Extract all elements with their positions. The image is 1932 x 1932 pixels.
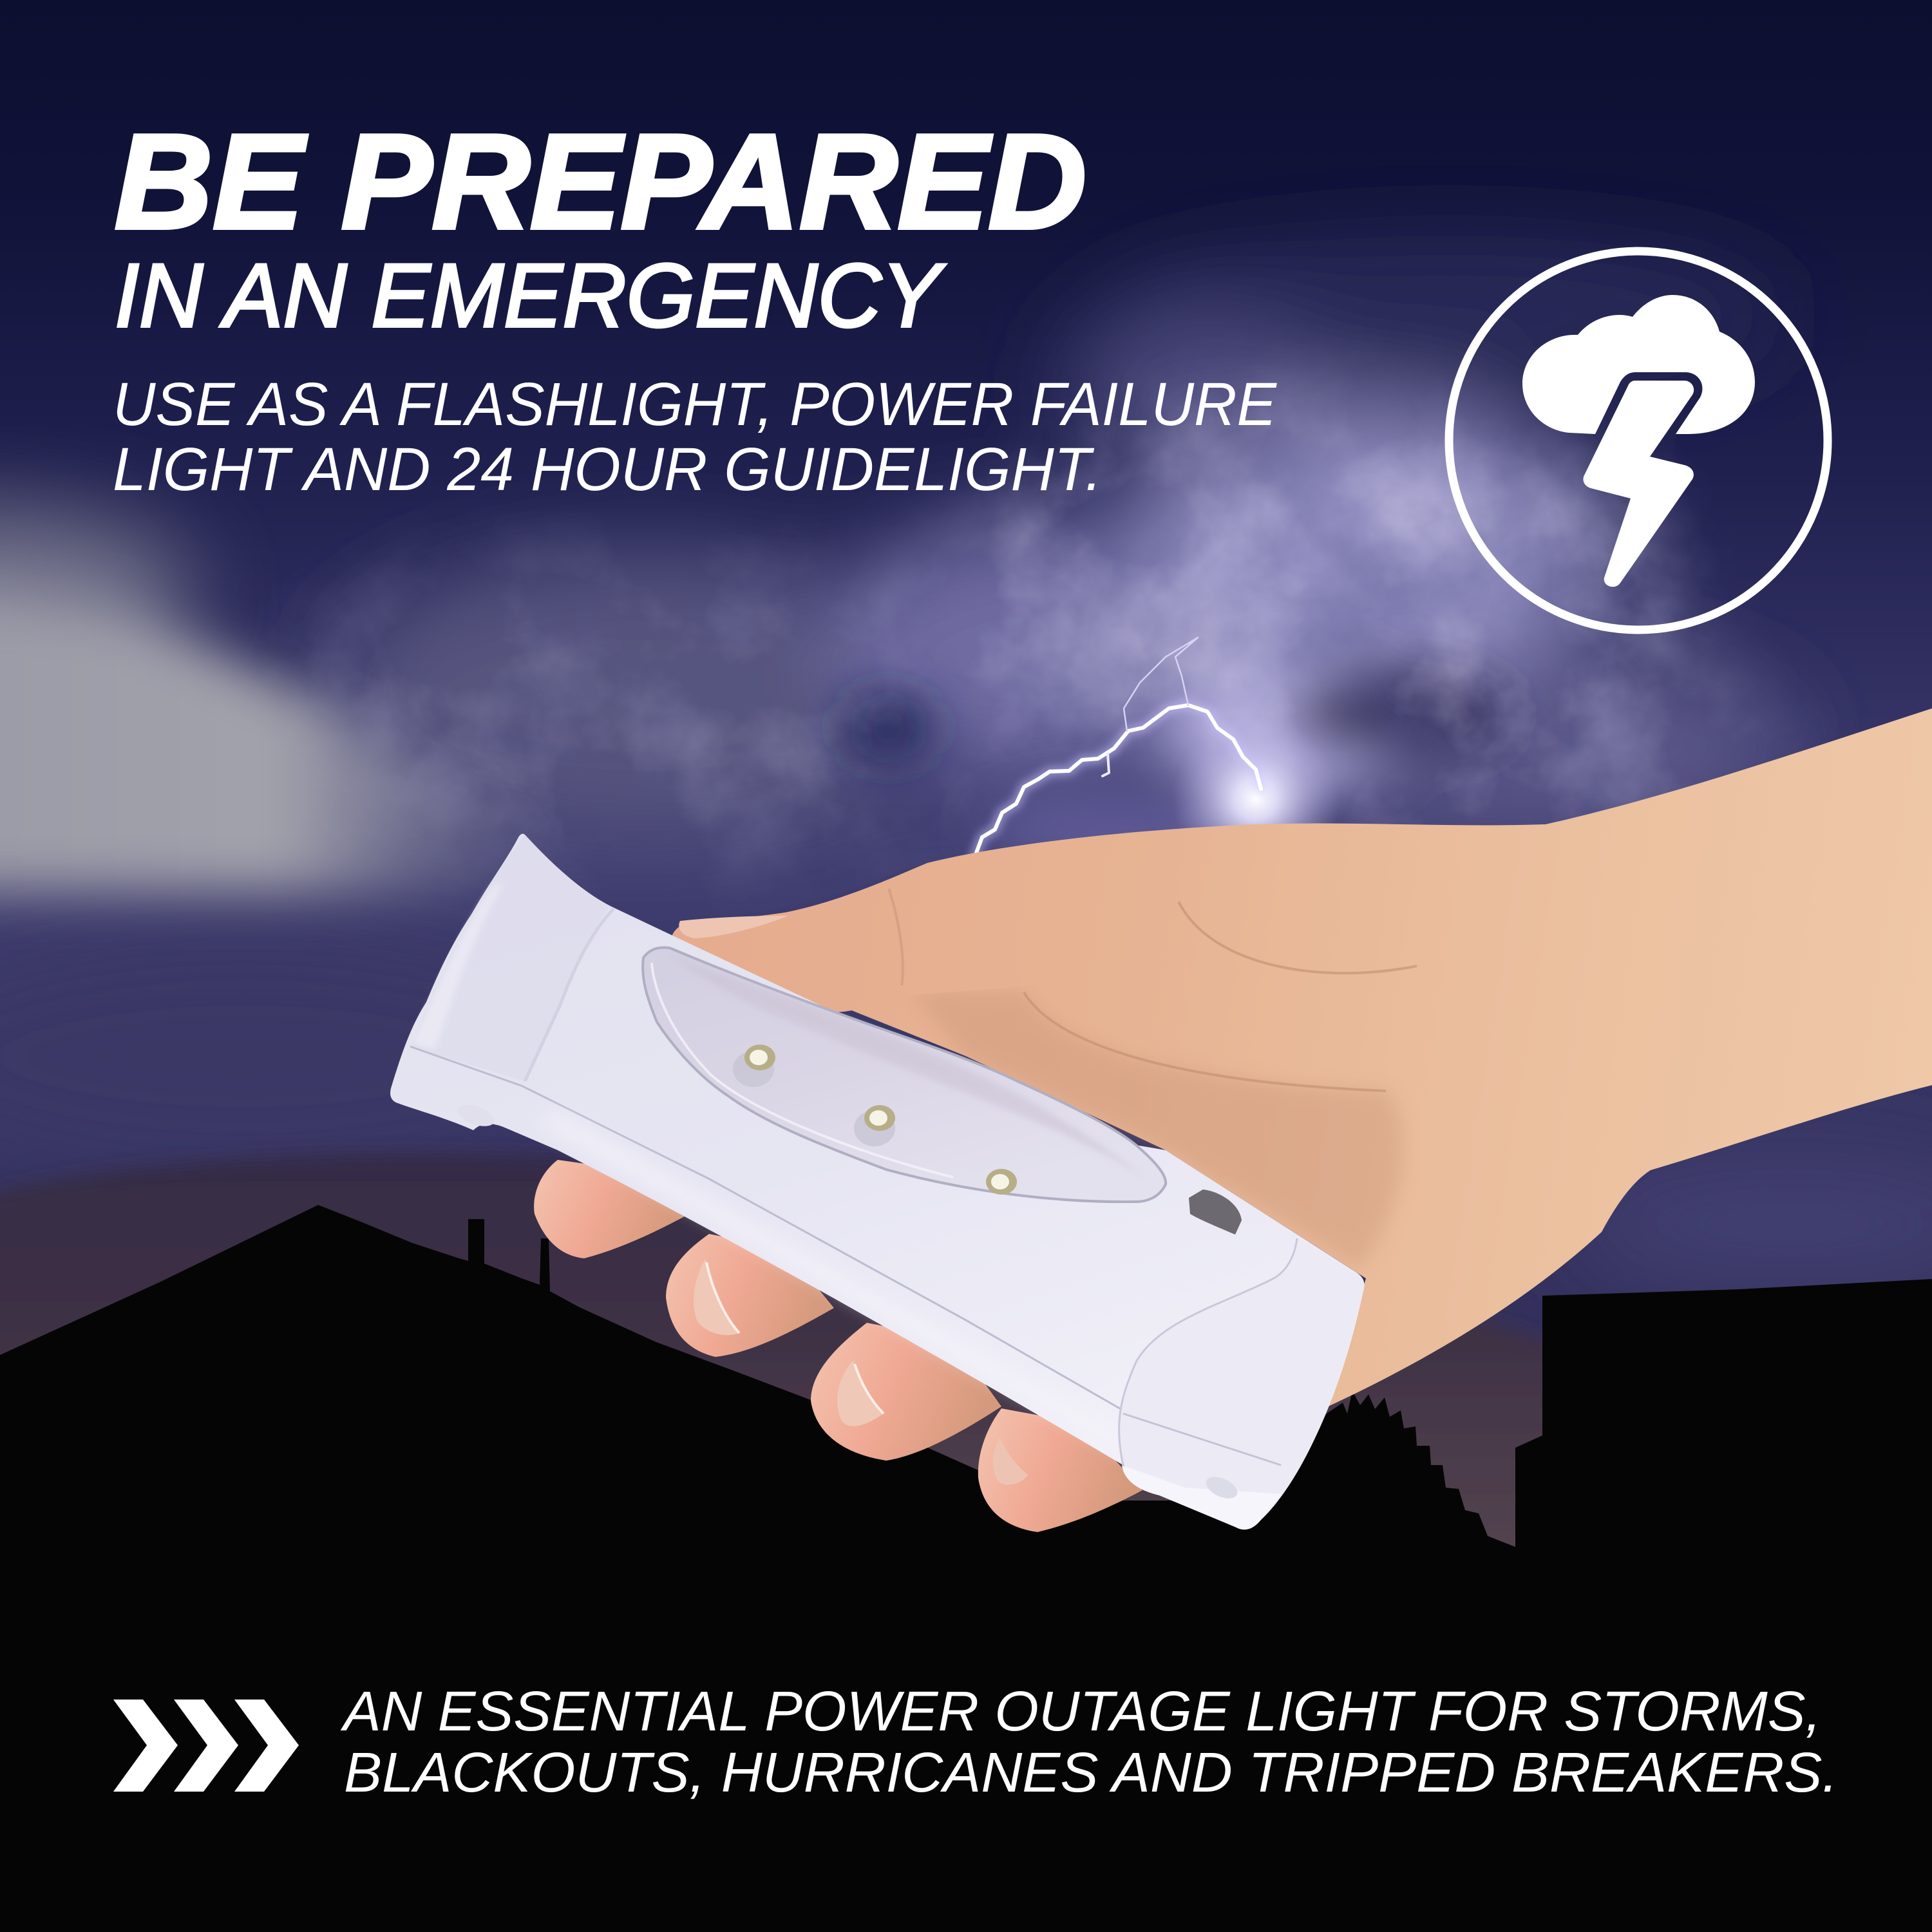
thumb nail	[679, 916, 788, 938]
hand: palm and arm	[788, 708, 1932, 1407]
heading: be prepared: BE PREPARED	[115, 107, 1086, 257]
bottom foot	[1122, 1465, 1282, 1530]
subheading: in an emergency: IN AN EMERGENCY	[115, 245, 945, 346]
callout text: AN ESSENTIAL POWER OUTAGE LIGHT FOR STORMS,	[340, 1680, 1821, 1743]
callout text: BLACKOUTS, HURRICANES AND TRIPPED BREAKERS.	[344, 1741, 1838, 1804]
flashlight body	[390, 834, 1364, 1530]
callout text	[340, 1680, 1838, 1804]
screw hole front	[455, 1101, 497, 1130]
icon: storm cloud with lightning in circle	[1449, 251, 1828, 630]
flashlight head shading	[410, 835, 611, 1081]
lower band highlight	[541, 1111, 1133, 1457]
lightning bolt	[974, 638, 1340, 882]
black house and tree silhouette	[0, 1205, 1932, 1932]
screw hole bottom	[1203, 1472, 1240, 1503]
light sensor	[1189, 1189, 1242, 1235]
background: stormy night sky	[0, 0, 1932, 1352]
description text: USE AS A FLASHLIGHT, POWER FAILURE	[113, 370, 1278, 439]
finger 3	[811, 1323, 1001, 1461]
LED 2	[854, 1105, 895, 1146]
finger 4	[978, 1408, 1142, 1532]
description text	[113, 370, 1278, 504]
clear lens	[643, 947, 1166, 1202]
LED 3	[986, 1169, 1017, 1195]
flashlight	[390, 834, 1364, 1530]
finger 1	[534, 1160, 689, 1258]
fingers	[534, 1160, 1142, 1532]
title block	[113, 107, 1278, 504]
icon: triple chevron arrows	[113, 1700, 299, 1792]
description text: LIGHT AND 24 HOUR GUIDELIGHT.	[113, 435, 1102, 504]
thumb	[672, 863, 1031, 1012]
cloud texture light	[310, 363, 1745, 871]
flashlight front face	[412, 882, 502, 1050]
bottom callout	[113, 1680, 1838, 1804]
LED 1	[733, 1045, 775, 1087]
end cap shade	[1119, 1238, 1364, 1530]
palm shadow	[913, 992, 1403, 1269]
flashlight beam	[0, 509, 528, 892]
body seams	[410, 909, 1281, 1465]
cloud texture dark	[1022, 462, 1622, 750]
horizon haze	[0, 1153, 1610, 1558]
finger 2	[666, 1234, 834, 1357]
palm creases	[1024, 902, 1417, 1091]
